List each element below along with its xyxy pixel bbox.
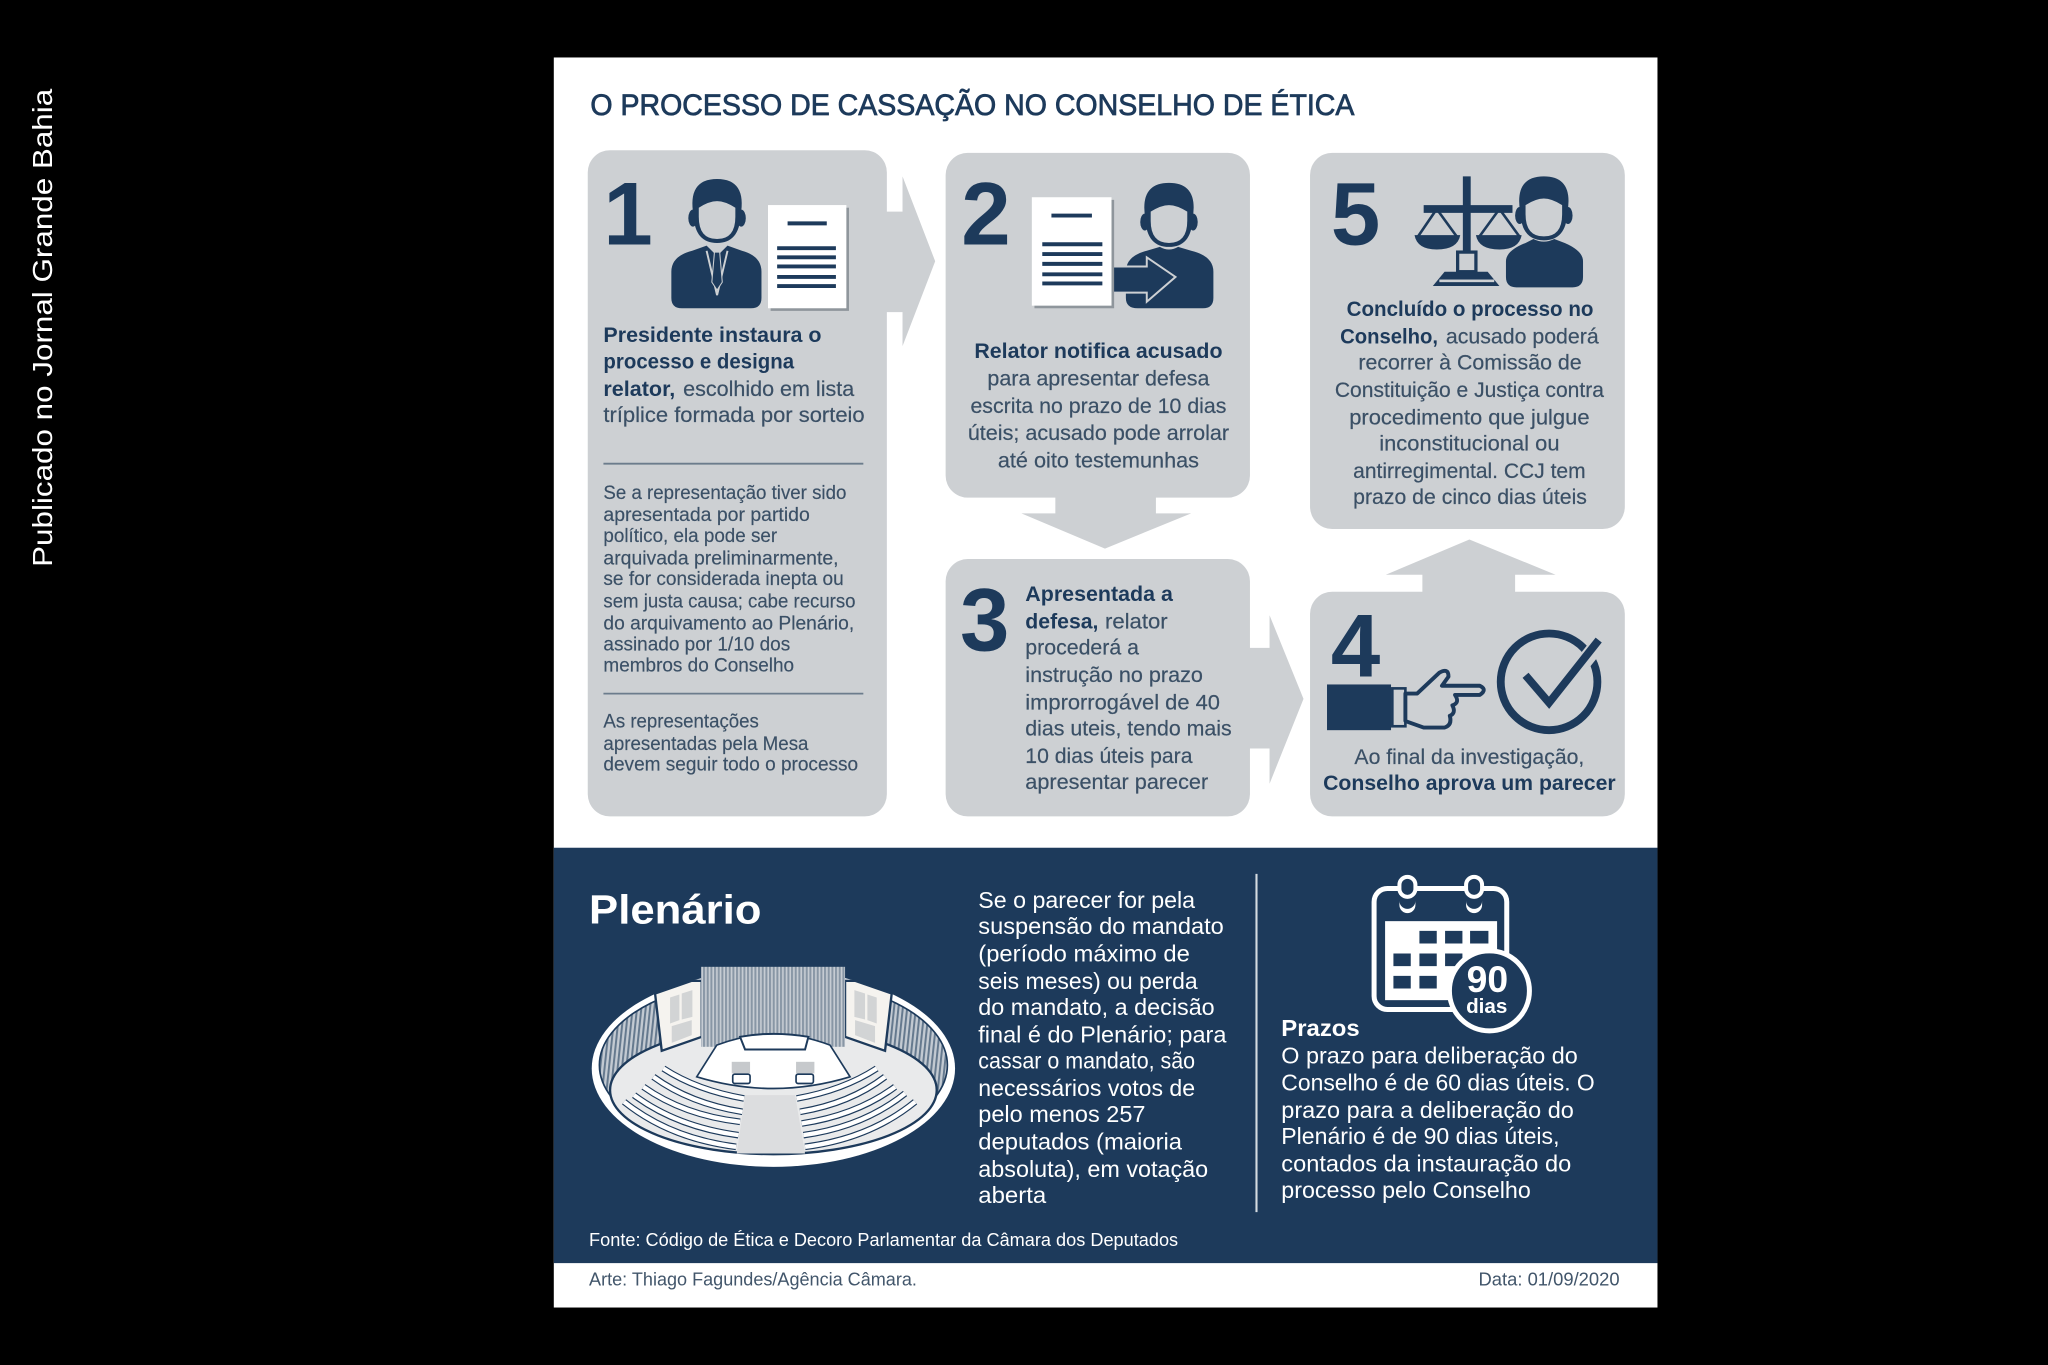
step 3 text — [1025, 581, 1232, 794]
Plenário text: (período máximo de — [978, 940, 1190, 966]
icon: scales of justice — [1415, 176, 1522, 286]
title: O PROCESSO DE CASSAÇÃO NO CONSELHO DE ÉTICA — [590, 88, 1354, 122]
Plenário text: seis meses) ou perda — [978, 968, 1198, 994]
source: Fonte: Código de Ética e Decoro Parlamentar da Câmara dos Deputados — [589, 1229, 1178, 1250]
step 1 note: Mesa: As representações — [603, 712, 759, 733]
number 1: 1 — [603, 164, 653, 263]
step 1 note: arquivamento: Se a representação tiver sido — [603, 483, 846, 504]
Prazos text: contados da instauração do — [1281, 1151, 1571, 1177]
step 2 text — [968, 338, 1229, 473]
step 1 note: arquivamento: apresentada por partido — [603, 505, 810, 526]
step 5 text — [1335, 296, 1604, 509]
step 3 text: apresentar parecer — [1025, 769, 1208, 794]
step 2 text: escrita no prazo de 10 dias — [970, 393, 1226, 418]
Prazos text: Plenário é de 90 dias úteis, — [1281, 1123, 1560, 1149]
Prazos text: O prazo para deliberação do — [1281, 1042, 1578, 1068]
step 5 text: Conselho, — [1340, 324, 1438, 349]
icon: man in suit — [671, 179, 761, 308]
step 2 text: até oito testemunhas — [998, 448, 1199, 473]
number 3: 3 — [960, 570, 1009, 669]
icon: calendar 90 dias: 90 — [1467, 958, 1508, 1000]
Plenário text: pelo menos 257 — [978, 1101, 1145, 1127]
step 1 note: arquivamento: assinado por 1/10 dos — [603, 634, 790, 655]
panel: step 5 — [1310, 153, 1625, 529]
heading: Plenário: Plenário — [589, 886, 761, 932]
arrow: step 4 to 5 — [1386, 539, 1556, 593]
Plenário text: necessários votos de — [978, 1075, 1195, 1101]
step 5 text: procedimento que julgue — [1349, 405, 1590, 430]
panel: Plenário — [554, 848, 1657, 1263]
credit: Arte: Thiago Fagundes/Agência Câmara. — [589, 1268, 917, 1289]
step 1 main text: processo e designa — [603, 348, 795, 373]
step 5 text: prazo de cinco dias úteis — [1353, 484, 1587, 509]
step 3 text: instrução no prazo — [1025, 662, 1203, 687]
panel: step 3 — [946, 559, 1250, 816]
step 3 text: 10 dias úteis para — [1025, 743, 1193, 768]
Prazos heading: Prazos — [1281, 1015, 1360, 1041]
step 1 main text: relator, — [603, 376, 675, 401]
Plenário text: deputados (maioria — [978, 1128, 1182, 1154]
step 3 text: relator — [1105, 608, 1168, 633]
arrow: step 1 to 2 — [886, 176, 935, 346]
side credit: Publicado no Jornal Grande Bahia — [27, 88, 58, 567]
number 5: 5 — [1331, 164, 1380, 263]
step 2 text: Relator notifica acusado — [974, 338, 1223, 363]
step 1 note: arquivamento: arquivada preliminarmente, — [603, 548, 839, 569]
panel: step 1 — [588, 150, 887, 816]
step 5 text: recorrer à Comissão de — [1358, 350, 1582, 375]
icon: pointing hand — [1327, 671, 1484, 730]
Prazos text: Conselho é de 60 dias úteis. O — [1281, 1070, 1595, 1096]
step 5 text: antirregimental. CCJ tem — [1353, 458, 1586, 483]
step 1 note: arquivamento: do arquivamento ao Plenário, — [603, 614, 854, 635]
step 4 text: Conselho aprova um parecer — [1323, 770, 1616, 795]
panel: step 4 — [1310, 592, 1625, 816]
icon: person — [1506, 176, 1583, 287]
step 1 main text: tríplice formada por sorteio — [603, 402, 865, 427]
step 1 note: arquivamento: se for considerada inepta ou — [603, 569, 844, 590]
Plenário text: aberta — [978, 1182, 1047, 1208]
Plenário text: cassar o mandato, são — [978, 1047, 1195, 1073]
step 5 text: Concluído o processo no — [1347, 296, 1593, 321]
panel: step 2 — [946, 153, 1250, 498]
Plenário text: suspensão do mandato — [978, 913, 1224, 939]
white page panel — [554, 57, 1657, 1308]
arrow: step 3 to 4 — [1249, 615, 1304, 784]
icon: calendar 90 dias — [1374, 877, 1529, 1031]
step 4 text: Ao final da investigação, — [1354, 744, 1584, 769]
Prazos text: processo pelo Conselho — [1281, 1177, 1531, 1203]
step 3 text: improrrogável de 40 — [1025, 689, 1220, 714]
step 1 note: Mesa: apresentadas pela Mesa — [603, 734, 809, 755]
step 5 text: Constituição e Justiça contra — [1335, 377, 1604, 402]
step 2 text: para apresentar defesa — [987, 365, 1209, 390]
step 3 text: Apresentada a — [1025, 581, 1174, 606]
Prazos text: prazo para a deliberação do — [1281, 1097, 1574, 1123]
step 3 text: dias uteis, tendo mais — [1025, 715, 1232, 740]
number 4: 4 — [1331, 597, 1380, 696]
Plenário text: final é do Plenário; para — [978, 1021, 1227, 1047]
Plenário text: absoluta), em votação — [978, 1156, 1208, 1182]
Plenário text: do mandato, a decisão — [978, 994, 1215, 1020]
step 1 main text — [603, 322, 865, 427]
step 1 note: arquivamento — [603, 483, 856, 676]
icon: document — [768, 205, 849, 311]
step 1 main text: escolhido em lista — [683, 376, 854, 401]
number 2: 2 — [961, 164, 1011, 263]
step 1 note: arquivamento: político, ela pode ser — [603, 526, 777, 547]
illustration: plenary chamber — [592, 967, 955, 1167]
Prazos text — [1281, 1042, 1595, 1203]
icon: document — [1032, 197, 1114, 308]
step 5 text: inconstitucional ou — [1379, 431, 1560, 456]
step 4 text — [1323, 744, 1616, 795]
step 1 main text: Presidente instaura o — [603, 322, 822, 347]
Plenário text: Se o parecer for pela — [978, 887, 1195, 913]
step 3 text: procederá a — [1025, 634, 1139, 659]
date: Data: 01/09/2020 — [1479, 1268, 1620, 1289]
icon: check circle — [1501, 634, 1601, 730]
step 5 text: acusado poderá — [1446, 324, 1599, 349]
step 1 note: Mesa: devem seguir todo o processo — [603, 755, 858, 776]
step 3 text: defesa, — [1025, 608, 1098, 633]
step 1 note: arquivamento: membros do Conselho — [603, 655, 794, 676]
icon: calendar 90 dias: dias — [1466, 995, 1507, 1018]
Plenário text — [978, 887, 1227, 1208]
step 1 note: arquivamento: sem justa causa; cabe recurso — [603, 591, 856, 612]
step 2 text: úteis; acusado pode arrolar — [968, 420, 1229, 445]
arrow: step 2 to 3 — [1021, 496, 1191, 549]
step 1 note: Mesa — [603, 712, 858, 776]
icon: accused person with arrow — [1112, 183, 1213, 308]
